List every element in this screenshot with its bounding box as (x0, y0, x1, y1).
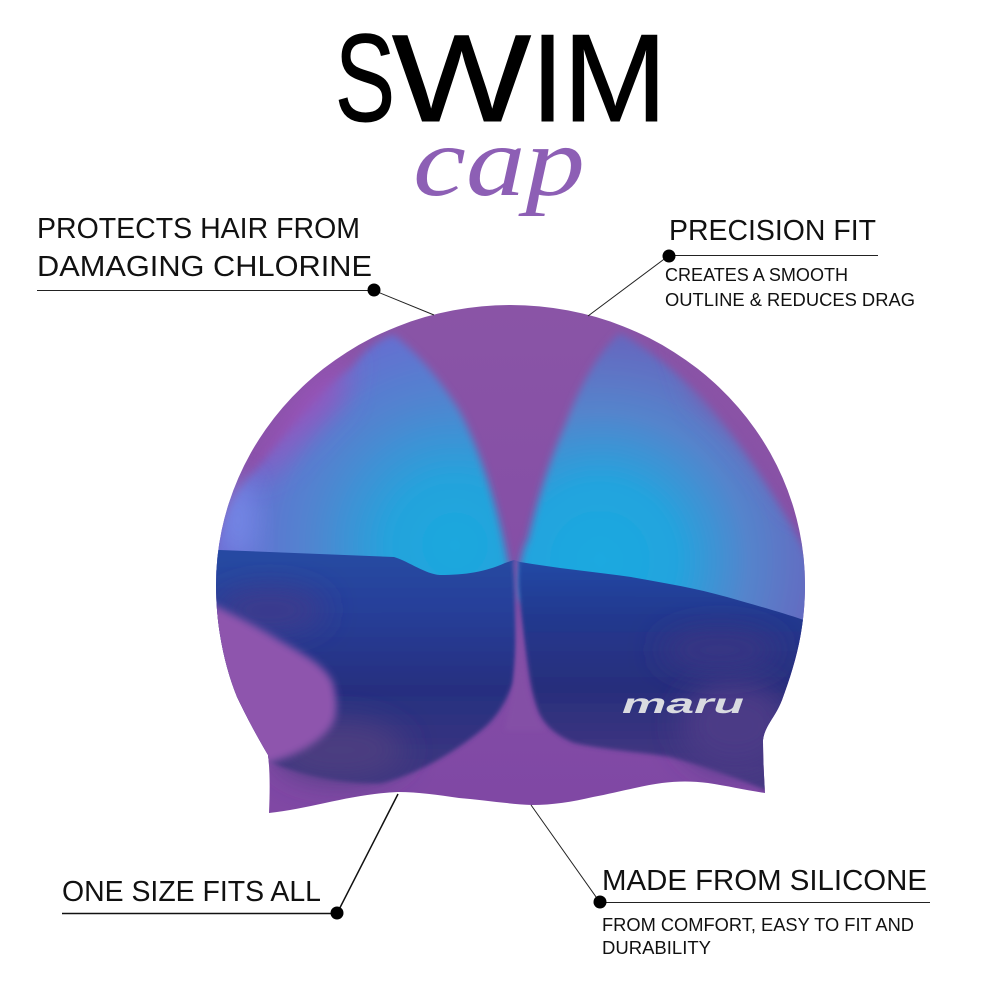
title: SWIM (335, 10, 667, 148)
title: SWIM: M (563, 10, 667, 148)
callout: precision fit (588, 215, 915, 316)
brand logo: maru: maru (622, 688, 744, 719)
subtitle: cap: cap (413, 106, 585, 217)
callout: precision fit: OUTLINE & REDUCES DRAG (665, 290, 915, 310)
title: SWIM: W (392, 10, 531, 148)
right navy panel (516, 561, 803, 792)
swim cap illustration (216, 305, 805, 813)
right blue panel (516, 333, 815, 650)
callout: protects hair: PROTECTS HAIR FROM (37, 213, 360, 245)
centre seam (512, 562, 523, 689)
callout: precision fit: PRECISION FIT (669, 215, 876, 247)
callout: precision fit: CREATES A SMOOTH (665, 265, 848, 285)
callout: protects hair: DAMAGING CHLORINE (37, 251, 372, 283)
callout: made from silicone: MADE FROM SILICONE (602, 865, 927, 897)
callout: made from silicone: FROM COMFORT, EASY TO FIT AND (602, 915, 914, 935)
callout: one size fits all: ONE SIZE FITS ALL (62, 876, 321, 908)
callout: made from silicone: DURABILITY (602, 938, 711, 958)
left navy panel (205, 540, 516, 783)
lower left purple lobe (205, 600, 336, 765)
left blue panel (205, 335, 513, 590)
title: SWIM: S (335, 10, 395, 148)
title: SWIM: I (531, 10, 564, 148)
navy panels (205, 540, 815, 800)
callout: made from silicone (531, 805, 930, 958)
callout: protects hair (37, 213, 434, 315)
callout: one size fits all (62, 794, 398, 920)
